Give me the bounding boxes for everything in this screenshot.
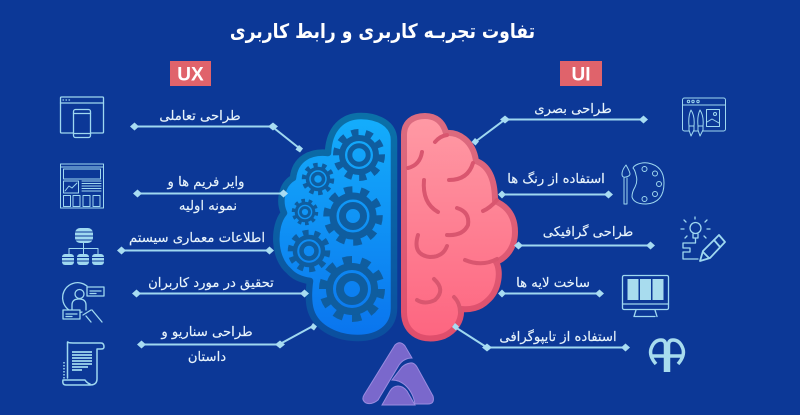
connector: typography <box>452 323 630 352</box>
label: scenario: داستان <box>188 350 226 365</box>
connector: information architecture <box>117 246 274 254</box>
label: typography: استفاده از تایپوگرافی <box>499 329 617 345</box>
badge: UI: UI <box>572 64 590 86</box>
icon: window with brushes <box>682 98 726 136</box>
connector: graphic design <box>514 242 655 250</box>
label: colours: استفاده از رنگ ها <box>507 171 605 187</box>
badge: UI <box>560 61 602 86</box>
icon: palette and brush <box>622 163 664 204</box>
connector: visual design <box>472 116 648 146</box>
gear: top <box>336 132 382 178</box>
label: interaction design: طراحی تعاملی <box>159 109 241 124</box>
brain folds <box>408 135 497 312</box>
label: scenario: طراحی سناریو و <box>160 325 253 340</box>
label: graphic design: طراحی گرافیکی <box>543 224 633 240</box>
connector: wireframes <box>133 190 288 198</box>
icon: window with phone <box>60 97 104 138</box>
connector: user research <box>132 290 309 298</box>
badge: UX <box>170 61 211 86</box>
brain: left hemisphere with gears <box>276 116 394 338</box>
icon: database hierarchy <box>62 228 104 265</box>
icon: user research <box>63 283 104 322</box>
badge: UX: UX <box>177 64 204 86</box>
icon: wireframe page <box>60 164 104 208</box>
label: visual design: طراحی بصری <box>534 102 612 117</box>
connector: interaction design <box>130 122 303 152</box>
icon: monitor with layers <box>622 276 668 316</box>
gear: lower small <box>290 232 328 270</box>
brain: right hemisphere <box>404 116 515 338</box>
gear: smallest <box>294 200 316 224</box>
connector: layers <box>498 290 604 298</box>
gear: small upper <box>304 165 332 193</box>
connector: colours <box>498 190 613 198</box>
label: layers: ساخت لایه ها <box>516 276 590 291</box>
connector: scenario <box>137 323 317 348</box>
label: wireframes: نمونه اولیه <box>179 199 237 214</box>
label: information architecture: اطلاعات معماری سیستم <box>129 231 265 246</box>
label: user research: تحقیق در مورد کاربران <box>148 276 274 291</box>
icon: scroll document <box>63 342 104 385</box>
label: wireframes <box>167 175 244 214</box>
label: wireframes: وایر فریم ها و <box>167 175 244 190</box>
gear: bottom large <box>323 260 381 318</box>
icon: typography AA <box>651 340 683 372</box>
label: scenario <box>160 325 253 365</box>
logo <box>363 343 433 405</box>
title: تفاوت تجربـه کاربری و رابط کاربری <box>230 21 535 43</box>
gear: middle large <box>327 190 379 242</box>
icon: light bulb and pencil <box>681 217 725 261</box>
